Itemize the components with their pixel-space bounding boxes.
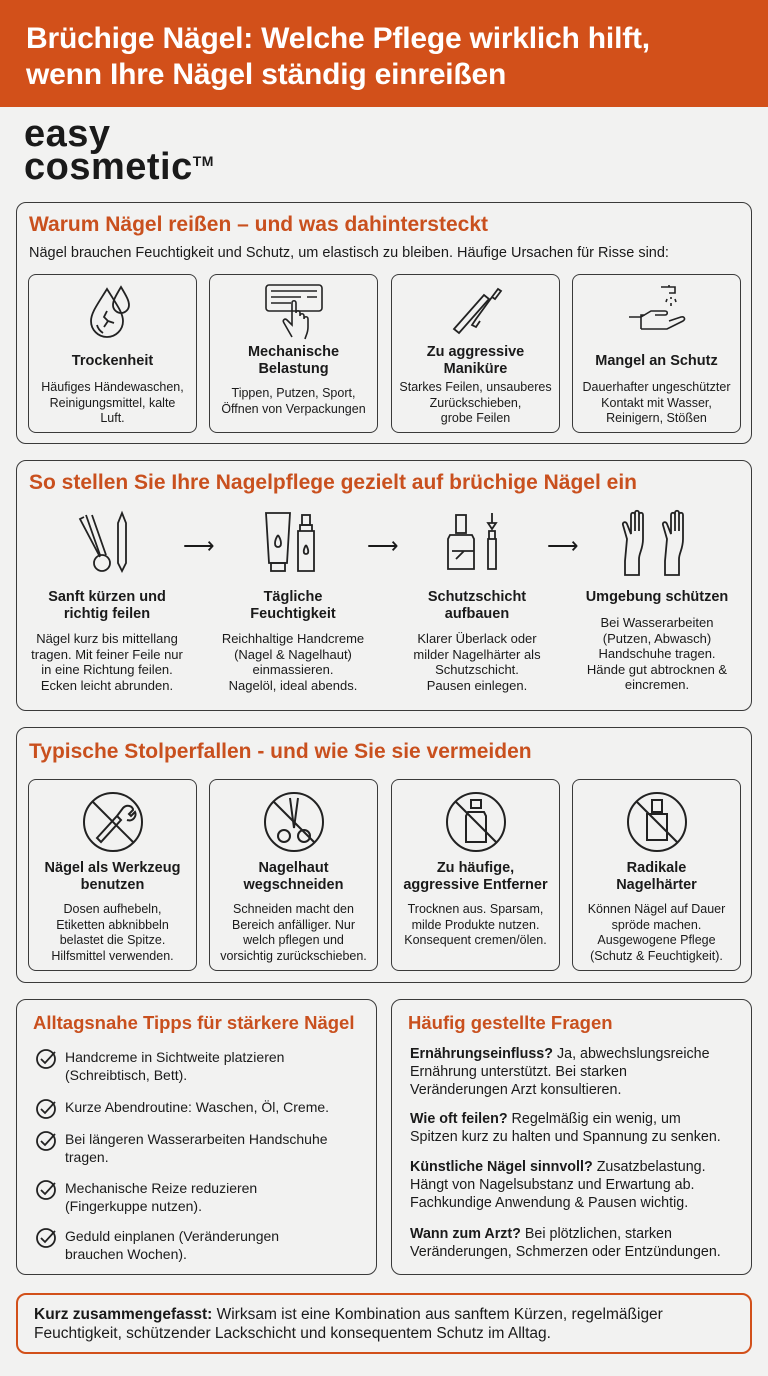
title — [616, 860, 697, 893]
title: Radikale — [627, 860, 686, 876]
text: Zurückschieben, — [430, 396, 521, 410]
icon: cream tube and dropper — [265, 512, 315, 572]
icon: no tools — [83, 792, 143, 852]
tip 1 — [36, 1049, 284, 1083]
faq 3: Künstliche Nägel sinnvoll? Zusatzbelastung. Hängt von Nagelsubstanz und Erwartung ab. Fachkundige Anwendung & Pausen wichtig. — [410, 1159, 706, 1211]
text: einmassieren. — [253, 662, 333, 677]
title: Schutzschicht — [428, 589, 526, 605]
title: Maniküre — [444, 361, 507, 377]
heading steps: So stellen Sie Ihre Nagelpflege gezielt auf brüchige Nägel ein — [29, 471, 637, 494]
tip 3: tragen. — [65, 1149, 109, 1165]
logo: cosmeticTM — [24, 146, 214, 188]
card: Werkzeug — [28, 779, 197, 971]
panel: pitfalls — [16, 727, 752, 983]
logo — [24, 113, 214, 188]
card: Manikuere — [391, 274, 560, 433]
title: Mechanische — [248, 344, 339, 360]
text: Handschuhe tragen. — [598, 646, 716, 661]
text — [221, 386, 366, 416]
icon: no hardener — [627, 792, 687, 852]
faq 4: Wann zum Arzt? Bei plötzlichen, starken Veränderungen, Schmerzen oder Entzündungen. — [410, 1226, 721, 1260]
title: richtig feilen — [64, 606, 150, 622]
text: welch pflegen und — [243, 933, 344, 947]
summary callout: Feuchtigkeit, schützender Lackschicht und konsequentem Schutz im Alltag. — [34, 1325, 551, 1342]
tip 4: Mechanische Reize reduzieren — [65, 1180, 257, 1196]
card: Nagelhaerter — [572, 779, 741, 971]
text: Trocknen aus. Sparsam, — [408, 902, 543, 916]
text: Tippen, Putzen, Sport, — [232, 386, 355, 400]
title: Zu aggressive — [427, 344, 524, 360]
text — [220, 902, 367, 962]
arrow 2: ⟶ — [367, 533, 399, 558]
summary callout — [16, 1293, 752, 1354]
text: Pausen einlegen. — [427, 678, 527, 692]
step 2 — [222, 512, 364, 692]
text: Häufiges Händewaschen, — [41, 380, 184, 394]
heading pitfalls: Typische Stolperfallen - und wie Sie sie vermeiden — [29, 740, 532, 763]
arrow 1: ⟶ — [183, 533, 215, 558]
text: Etiketten abknibbeln — [56, 918, 169, 932]
card: Mangel an Schutz — [572, 274, 741, 433]
step 3 — [413, 513, 541, 692]
title: Trockenheit — [72, 353, 153, 369]
text — [41, 380, 184, 425]
panel: causes — [16, 202, 752, 444]
card: Mechanische Belastung — [209, 274, 378, 433]
step 1 — [31, 510, 183, 692]
tip 3: Bei längeren Wasserarbeiten Handschuhe — [65, 1131, 328, 1147]
title: aufbauen — [445, 606, 509, 622]
logo: easy — [24, 113, 111, 155]
text — [51, 902, 174, 962]
card: Nagelhaut — [209, 779, 378, 971]
text: (Nagel & Nagelhaut) — [234, 646, 352, 662]
heading tips: Alltagsnahe Tipps für stärkere Nägel — [33, 1012, 354, 1033]
icon: no remover bottle — [446, 792, 506, 852]
faq 2: Wie oft feilen? Regelmäßig ein wenig, um Spitzen kurz zu halten und Spannung zu senken. — [410, 1111, 721, 1145]
icon: no scissors — [264, 792, 324, 852]
text — [222, 631, 364, 692]
title — [428, 589, 526, 622]
icon: file and pusher — [452, 288, 502, 334]
title: Zu häufige, — [437, 860, 514, 876]
text: grobe Feilen — [441, 411, 510, 425]
title — [48, 589, 166, 622]
tip 3 — [35, 1130, 328, 1166]
text: tragen. Mit feiner Feile nur — [31, 646, 183, 662]
heading causes: Warum Nägel reißen – und was dahintersteckt — [29, 213, 488, 236]
icon: hand under tap — [629, 285, 686, 330]
text — [582, 380, 730, 425]
text — [404, 902, 547, 947]
tip 2: Kurze Abendroutine: Waschen, Öl, Creme. — [65, 1099, 329, 1115]
text: spröde machen. — [612, 918, 701, 932]
text: Reinigungsmittel, kalte — [50, 396, 175, 410]
panel: care steps — [16, 460, 752, 711]
text: Dauerhafter ungeschützter — [582, 380, 730, 394]
title: wegschneiden — [244, 877, 343, 893]
tip 5: brauchen Wochen). — [65, 1246, 187, 1262]
text: Starkes Feilen, unsauberes — [399, 380, 552, 394]
heading FAQ: Häufig gestellte Fragen — [408, 1012, 613, 1033]
summary callout: Kurz zusammengefasst: Wirksam ist eine Kombination aus sanftem Kürzen, regelmäßiger — [34, 1306, 663, 1323]
tip 4: (Fingerkuppe nutzen). — [65, 1198, 202, 1214]
header title: Brüchige Nägel: Welche Pflege wirklich hilft, — [26, 22, 650, 55]
text: (Schutz & Feuchtigkeit). — [590, 948, 723, 962]
title: benutzen — [81, 877, 144, 893]
text: Können Nägel auf Dauer — [588, 902, 725, 916]
tip 5: Geduld einplanen (Veränderungen — [65, 1228, 279, 1244]
title: Nagelhärter — [616, 877, 697, 893]
text: vorsichtig zurückschieben. — [220, 948, 367, 962]
header title: wenn Ihre Nägel ständig einreißen — [26, 58, 506, 91]
title: Mangel an Schutz — [595, 353, 718, 369]
tip 4 — [35, 1179, 257, 1215]
text: Kontakt mit Wasser, — [601, 396, 712, 410]
title: Tägliche — [264, 589, 322, 605]
text: in eine Richtung feilen. — [41, 662, 173, 677]
text: Öffnen von Verpackungen — [221, 402, 366, 416]
title: Belastung — [258, 361, 329, 377]
text — [31, 631, 183, 692]
text — [588, 902, 726, 962]
title — [244, 860, 343, 893]
tip 5 — [35, 1227, 279, 1263]
title — [248, 344, 339, 377]
text: Schneiden macht den — [233, 902, 354, 916]
icon: gloves — [622, 510, 684, 576]
title: Sanft kürzen und — [48, 589, 166, 605]
faq 1: Veränderungen Arzt konsultieren. — [410, 1082, 621, 1098]
text: Dosen aufhebeln, — [64, 902, 162, 916]
text: Konsequent cremen/ölen. — [404, 933, 547, 947]
title — [427, 344, 524, 377]
title: Nagelhaut — [258, 860, 329, 876]
icon: clipper and file — [78, 510, 127, 573]
text: Reinigern, Stößen — [606, 411, 707, 425]
tip 1: (Schreibtisch, Bett). — [65, 1067, 187, 1083]
text — [399, 380, 552, 425]
title — [403, 860, 548, 893]
tip 1: Handcreme in Sichtweite platzieren — [65, 1049, 284, 1065]
text — [413, 631, 541, 692]
text: Ausgewogene Pflege — [597, 933, 716, 947]
title: Umgebung schützen — [586, 589, 728, 605]
text: (Putzen, Abwasch) — [603, 630, 711, 646]
faq 1: Ernährungseinfluss? Ja, abwechslungsreiche Ernährung unterstützt. Bei starken — [410, 1046, 710, 1080]
header title — [0, 0, 768, 107]
text: Bei Wasserarbeiten — [601, 615, 713, 630]
panel: tips — [16, 999, 377, 1275]
title — [250, 589, 336, 622]
text: milde Produkte nutzen. — [412, 918, 539, 932]
faq 1 — [410, 1045, 723, 1099]
text: Reichhaltige Handcreme — [222, 631, 364, 646]
text — [587, 615, 727, 692]
text: Bereich anfälliger. Nur — [232, 918, 355, 932]
title: Feuchtigkeit — [250, 606, 336, 622]
text: Nägel kurz bis mittellang — [36, 631, 178, 646]
arrow 3: ⟶ — [547, 533, 579, 558]
icon: cracked drops — [90, 285, 130, 338]
text: Luft. — [100, 411, 125, 425]
step 4 — [586, 510, 728, 692]
text: Hilfsmittel verwenden. — [51, 948, 174, 962]
text: Ecken leicht abrunden. — [41, 678, 173, 692]
text: Klarer Überlack oder — [417, 631, 537, 646]
icon: polish and brush — [447, 513, 498, 570]
text: Nagelöl, ideal abends. — [229, 678, 357, 692]
icon: keyboard hand — [265, 284, 323, 340]
title — [45, 860, 180, 893]
title: aggressive Entferner — [403, 877, 548, 893]
text: belastet die Spitze. — [60, 933, 165, 947]
text: eincremen. — [625, 677, 689, 692]
text: Hände gut abtrocknen & — [587, 662, 727, 676]
text: milder Nagelhärter als — [413, 646, 541, 662]
text: Schutzschicht. — [435, 662, 519, 677]
intro text: Nägel brauchen Feuchtigkeit und Schutz, um elastisch zu bleiben. Häufige Ursachen für Risse sind: — [29, 245, 669, 261]
card: Trockenheit — [28, 274, 197, 433]
panel: FAQ — [391, 999, 752, 1275]
card: Entferner — [391, 779, 560, 971]
title: Nägel als Werkzeug — [45, 860, 180, 876]
